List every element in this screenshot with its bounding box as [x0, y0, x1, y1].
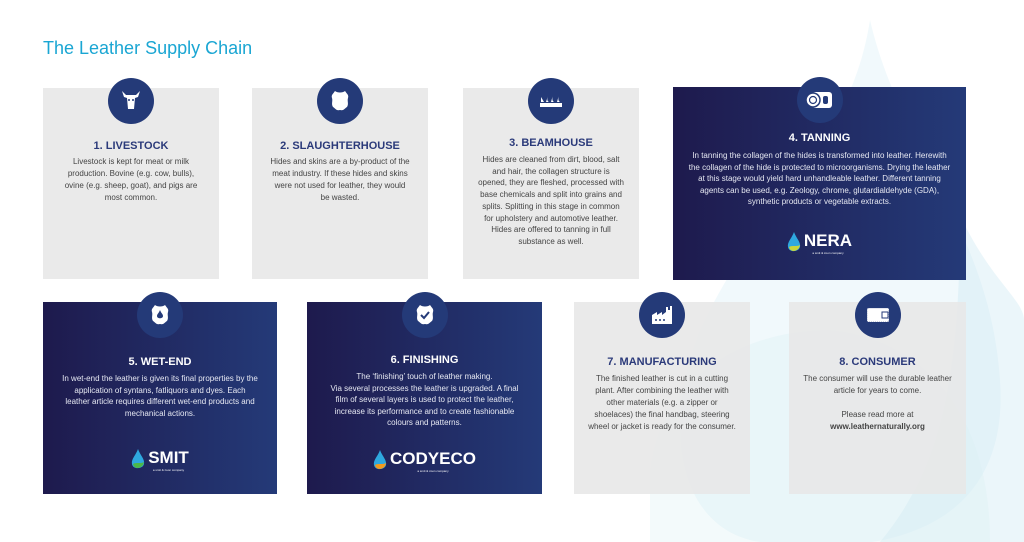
- panel: wet-end: [43, 302, 277, 494]
- logo: CODYECO: CODYECO: [390, 449, 476, 468]
- heading: 2. SLAUGHTERHOUSE: [280, 140, 400, 152]
- icon: blades: [528, 78, 574, 124]
- logo: SMIT: a smit & zoon company: [153, 468, 184, 472]
- heading: 8. CONSUMER: [839, 356, 916, 368]
- logo: NERA: a smit & zoon company: [812, 251, 844, 255]
- text: Livestock is kept for meat or milk production. Bovine (e.g. cow, bulls), ovine (e.g. sheep, goat), and pigs are most common.: [65, 157, 197, 202]
- panel: slaughterhouse: [252, 88, 428, 279]
- text: The finished leather is cut in a cutting plant. After combining the leather with other materials (e.g. a zipper or shoelaces) the final handbag, steering wheel or jacket is ready for the consumer.: [588, 374, 736, 431]
- text: Via several processes the leather is upgraded. A final film of several layers is used to protect the leather, increase its performance and to create fashionable colours and patterns.: [331, 384, 518, 427]
- title: The Leather Supply Chain: [43, 38, 252, 58]
- panel: beamhouse: [463, 88, 639, 279]
- icon: factory: [639, 292, 685, 338]
- icon: wallet: [854, 292, 900, 338]
- logo: SMIT: [132, 448, 189, 472]
- heading: 1. LIVESTOCK: [94, 140, 168, 152]
- text: www.leathernaturally.org: [830, 422, 925, 431]
- text: In wet-end the leather is given its final properties by the application of syntans, fatliquors and dyes. Each leather article requires different wet-end products and mechanical actions.: [62, 374, 258, 418]
- panel: livestock: [43, 88, 219, 279]
- logo: NERA: [788, 231, 852, 255]
- panel: manufacturing: [574, 302, 750, 494]
- text: The ‘finishing’ touch of leather making.: [356, 372, 493, 381]
- icon: hide check: [402, 292, 448, 338]
- panel: consumer: [789, 302, 966, 494]
- logo: SMIT: SMIT: [148, 448, 189, 467]
- icon: hide: [317, 78, 363, 124]
- text: Hides and skins are a by-product of the meat industry. If these hides and skins were not used for leather, they would be wasted.: [270, 157, 410, 202]
- icon: drum: [796, 77, 842, 123]
- heading: 5. WET-END: [129, 356, 191, 368]
- heading: 4. TANNING: [789, 132, 850, 144]
- logo: CODYECO: a smit & zoon company: [417, 469, 449, 473]
- heading: 6. FINISHING: [391, 354, 458, 366]
- text: Please read more at: [841, 410, 914, 419]
- heading: 3. BEAMHOUSE: [509, 137, 593, 149]
- panel: finishing: [307, 302, 542, 494]
- icon: hide drop: [137, 292, 183, 338]
- text: The consumer will use the durable leather article for years to come.: [803, 374, 952, 395]
- icon: cow: [108, 78, 154, 124]
- text: In tanning the collagen of the hides is transformed into leather. Herewith the collagen of the hide is protected to microorganisms. Drying the leather at this stage would yield hard unhandleable leather. Different tanning agents can be used, e.g. Zeology, chrome, glutardialdehyde (GDA), synthetic products or vegetable extracts.: [689, 151, 950, 206]
- logo: CODYECO: [374, 449, 476, 473]
- heading: 7. MANUFACTURING: [607, 356, 717, 368]
- panel: tanning: [673, 87, 966, 280]
- text: [803, 374, 952, 431]
- text: Hides are cleaned from dirt, blood, salt and hair, the collagen structure is opened, they are fleshed, processed with base chemicals and split into grains and splits. Splitting in this stage in common for upholstery and automotive leather. Hides are offered to tanning in full substance as well.: [478, 155, 624, 246]
- logo: NERA: NERA: [804, 231, 852, 250]
